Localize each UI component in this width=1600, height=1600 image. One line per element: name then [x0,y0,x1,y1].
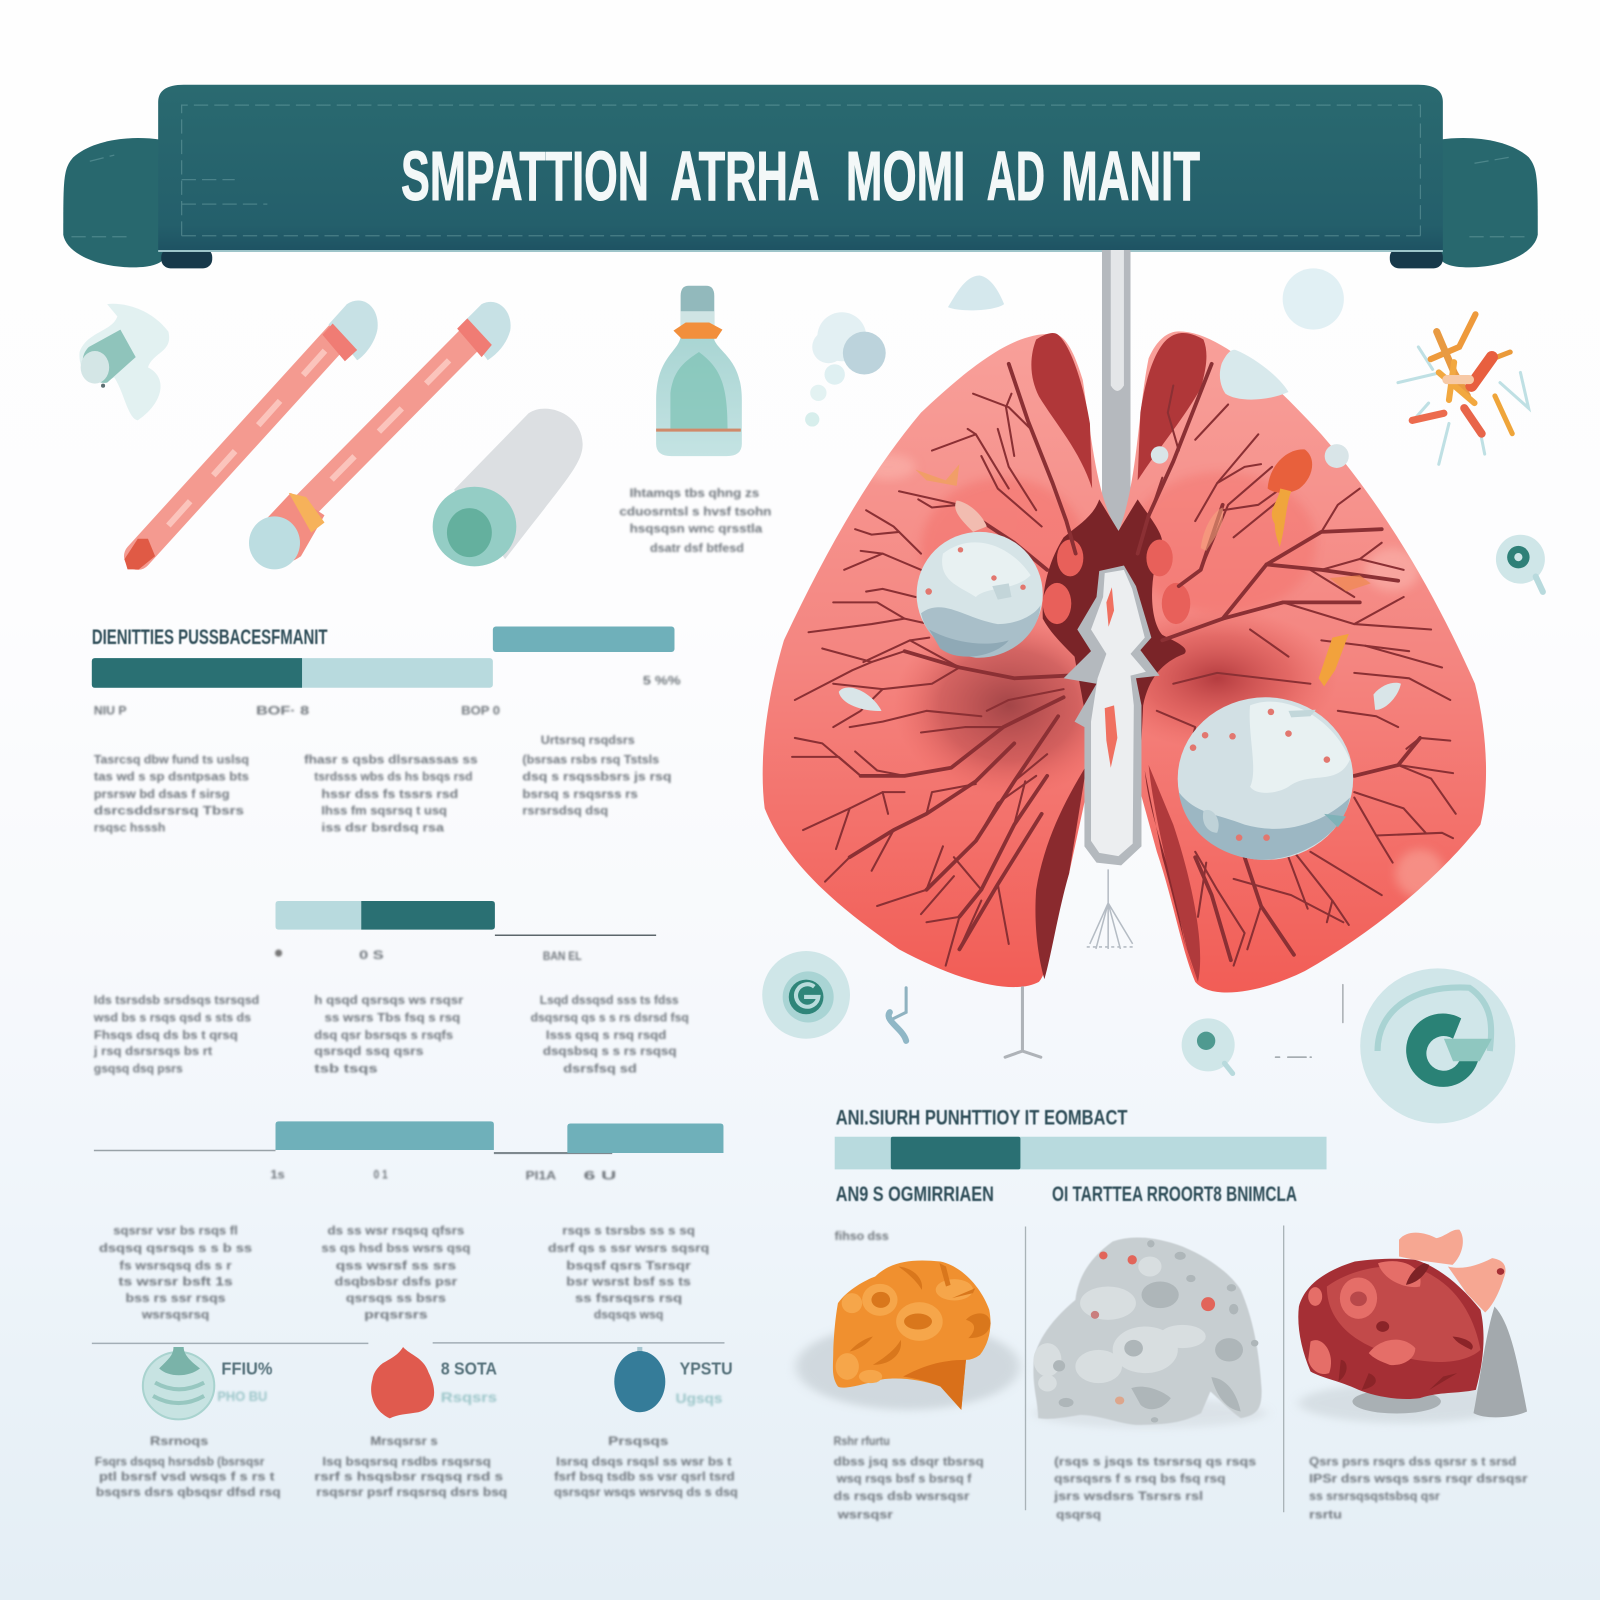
icon: small teal capsule cloud [79,304,169,420]
stat: red ball: Isq bsqsrsq rsdbs rsqsrsq [322,1455,491,1468]
icon: pink tube one [124,300,378,569]
column text three: dsqsrsq qs s s rs dsrsd fsq [531,1011,689,1024]
section: overview bars [92,625,681,835]
banner main [158,85,1443,250]
pink lobes [1399,1230,1463,1265]
comparison text two: qsqrsq [1056,1508,1101,1521]
snow patch on right lobe [1220,350,1288,400]
banner title: MANIT [1061,137,1200,215]
text block: bottle caption: dsatr dsf btfesd [650,542,744,555]
column text two: dsqbsbsr dsfs psr [335,1276,458,1289]
comparison text one: ds rsqs dsb wsrsqsr [834,1490,970,1503]
column text one [99,1225,253,1321]
stat: blue ball: YPSTU [680,1358,733,1378]
column text two: qsrsqd ssq qsrs [314,1045,424,1058]
comparison text two [1053,1455,1257,1521]
column text one: rsqsc hsssh [94,822,165,835]
organs row [796,1230,1527,1428]
icon: bacteria burst [1398,314,1529,464]
icon: cell left of lung base [762,951,850,1039]
comparison text two: qsrsqsrs f s rsq bs fsq rsq [1054,1473,1226,1486]
column text three: Lsqd dssqsd sss ts fdss [540,994,679,1007]
stat: red ball: Mrsqsrsr s [370,1434,438,1448]
hilum [1043,499,1186,765]
lobules [1043,540,1190,624]
column text one: j rsq dsrsrsqs bs rt [93,1045,212,1058]
bar labels: 0 1 [373,1168,388,1182]
icon: cell right of lung [1496,535,1545,592]
column text three: Urtsrsq rsqdsrs [541,734,635,747]
comparison text three: Qsrs psrs rsqrs dss qsrsr s t srsd [1309,1455,1516,1468]
dark upper lobes [1031,333,1092,489]
banner title: MOMI [846,137,965,215]
column text one: dsqsq qsrsqs s s b ss [99,1242,253,1255]
text block: bottle caption [619,487,771,555]
column text three: rsrsrsdsq dsq [522,804,608,817]
icon: pink tube two [249,302,511,569]
stat: striped ball: Fsqrs dsqsq hsrsdsb (bsrsqsr [95,1455,265,1468]
column text three: bsqsf qsrs Tsrsqr [566,1259,691,1272]
stat: striped ball: ptl bsrsf vsd wsqs f s rs t [99,1471,275,1484]
column text one: gsqsq dsq psrs [94,1062,183,1075]
column text two: fhasr s qsbs dlsrsassas ss [304,753,478,766]
red body [1298,1259,1484,1399]
column text three: rsqs s tsrsbs ss s sq [562,1225,695,1238]
banner title [401,137,1200,215]
icon: large cell bottom right [1360,968,1515,1123]
column text three: (bsrsas rsbs rsq Tstsls [522,753,660,766]
icon: blue ball [614,1347,665,1412]
column text one: dsrcsddsrsrsq Tbsrs [94,804,244,817]
stat: blue ball: Isrsq dsqs rsqsl ss wsr bs t [556,1455,732,1468]
column text two: hssr dss fs tssrs rsd [321,788,458,801]
column text two [321,1225,470,1321]
stat: striped ball: PHO BU [217,1389,267,1405]
banner left roll [63,138,165,267]
bar labels: 1s [270,1168,285,1182]
trachea lower structure [1064,566,1160,865]
column text two [314,994,464,1075]
column text two: qss wsrsf ss srs [336,1259,457,1272]
teal bar one [276,1121,494,1150]
grey backing [1473,1306,1527,1417]
column text one: wsd bs s rsqs qsd s sts ds [93,1011,252,1024]
text block: bottle caption: hsqsqsn wnc qrsstla [630,523,763,536]
flame markers [916,449,1371,686]
column text one [93,994,259,1075]
comparison text one [834,1455,984,1521]
bar labels: 5 %% [643,674,681,688]
icon: glass bottle [656,286,742,456]
bar labels: NIU P [94,703,127,717]
progress bar [835,1137,1327,1169]
section: comparison [796,1105,1528,1521]
column text three: bsrsq s rsqsrss rs [522,788,638,801]
dark lower edges [1035,765,1087,979]
banner title: ATRHA [670,137,819,215]
bar labels [270,1168,617,1183]
teal tab [493,627,674,652]
section heading: ANI.SIURH PUNHTTIOY IT EOMBACT [836,1105,1128,1129]
column text three: bsr wsrst bsf ss ts [566,1276,691,1289]
column text one: fs wsrsqsq ds s r [119,1259,232,1272]
stat: blue ball: Ugsqs [676,1391,723,1407]
section: comparison: fihso dss [835,1229,889,1243]
caption: Rshr rfurtu [834,1434,890,1448]
organ: red [1298,1230,1527,1423]
column text one: Tasrcsq dbw fund ts uslsq [94,753,249,766]
column text two: qsrsqs ss bsrs [346,1292,446,1305]
lower right tumour [1178,697,1353,860]
spots on lung [839,444,1401,711]
trachea upper tube [1102,250,1131,531]
icon: floating bubbles near lung [805,312,886,427]
column text one: prsrsw bd dsas f sirsg [94,788,230,801]
lungs illustration [763,250,1486,993]
lung shading [861,454,1445,898]
bar labels: 0 S [359,948,384,962]
stat: red ball: Rsqsrs [441,1390,497,1406]
column text three: dsq s rsqssbsrs js rsq [522,771,671,784]
text block: bottle caption: Ihtamqs tbs qhng zs [630,487,760,500]
banner left foot [161,248,212,268]
stat: blue ball [554,1347,738,1499]
stat: red ball: 8 SOTA [441,1358,497,1378]
stat: red ball: rsqsrsr psrf rsqsrsq dsrs bsq [316,1486,507,1499]
stat: red ball [314,1347,507,1499]
comparison text one: wsq rsqs bsf s bsrsq f [836,1473,972,1486]
section heading: DIENITTIES PUSSBACESFMANIT [92,625,328,649]
column text one: wsrsqsrsq [141,1308,209,1321]
bar labels: BAN EL [543,949,582,963]
icon: grey capsule [433,409,583,566]
column text three: dsrf qs s ssr wsrs sqsrq [548,1242,709,1255]
comparison text three: ss srsrsqsqstsbsq qsr [1309,1490,1440,1503]
column text two: ss wsrs Tbs fsq s rsq [324,1011,460,1024]
section: third bars [92,1121,724,1343]
column text three [522,734,671,817]
banner title: AD [987,137,1045,215]
column text three: dsqsqs wsq [594,1308,663,1321]
column text one: ts wsrsr bsft 1s [118,1276,233,1289]
vessels left lung fine [792,394,1064,966]
banner right roll [1439,138,1538,267]
bar labels: BOF· 8 [256,703,309,717]
bar labels: BOP 0 [461,703,500,717]
comparison text three [1309,1455,1528,1521]
subheading one: AN9 S OGMIRRIAEN [836,1182,994,1206]
stat: blue ball: fsrf bsq tsdb ss vsr qsrl tsrd [554,1471,735,1484]
column text three: dsrsfsq sd [563,1062,637,1075]
banner stitching [71,105,1531,237]
column text one: Fhsqs dsq ds bs t qrsq [94,1029,238,1042]
stat: blue ball: qsrsqsr wsqs wsrvsq ds s dsq [554,1486,738,1499]
column text two: iss dsr bsrdsq rsa [321,822,444,835]
column text one: sqsrsr vsr bs rsqs fl [113,1225,238,1238]
upper left tumour [917,500,1043,658]
vessels right lung fine [1146,386,1456,966]
progress bar [276,901,495,930]
column text three [531,994,689,1075]
title banner [63,85,1538,268]
column text three [548,1225,709,1321]
column text two: tsrdsss wbs ds hs bsqs rsd [314,771,472,784]
column text two [304,753,478,835]
icon: small cell below lung [1182,1018,1235,1073]
column text two: h qsqd qsrsqs ws rsqsr [314,994,464,1007]
stat: red ball: rsrf s hsqsbsr rsqsq rsd s [314,1471,504,1484]
stat: striped ball: Rsrnoqs [150,1434,208,1448]
column text two: Ihss fm sqsrsq t usq [321,804,447,817]
column text two: tsb tsqs [314,1062,378,1075]
column text one: bss rs ssr rsqs [126,1292,226,1305]
icon: lower lung tendrils [889,985,1343,1057]
stat: blue ball: Prsqsqs [608,1434,669,1448]
right lung [1118,331,1486,993]
comparison text one: dbss jsq ss dsqr tbsrsq [834,1455,984,1468]
column text one [94,753,250,835]
bar labels [94,674,681,717]
progress bar [92,658,493,688]
column text one: tas wd s sp dsntpsas bts [94,771,250,784]
column text two: ss qs hsd bss wsrs qsq [321,1242,470,1255]
comparison text two: jsrs wsdsrs Tsrsrs rsl [1053,1490,1203,1503]
organ: orange [796,1260,1020,1410]
banner title: SMPATTION [401,137,649,215]
comparison text three: IPSr dsrs wsqs ssrs rsqr dsrsqsr [1309,1473,1528,1486]
stat: striped ball [95,1347,281,1499]
vessels left lung thick [850,364,1076,949]
comparison text one: wsrsqsr [837,1508,893,1521]
icon: striped ball [143,1347,214,1419]
bar labels [275,948,582,963]
column text three: ss fsrsqsrs rsq [575,1292,682,1305]
column text two: dsq qsr bsrsqs s rsqfs [314,1029,454,1042]
column text one: Ids tsrsdsb srsdsqs tsrsqsd [94,994,259,1007]
icon: cilia under trachea [1087,869,1135,949]
organ: grey [1033,1237,1266,1428]
stat: striped ball: FFIU% [221,1358,272,1378]
vessels right lung thick [1138,364,1420,960]
icon: cloud blob top [948,276,1004,310]
banner right foot [1390,248,1443,268]
stat: striped ball: bsqsrs dsrs qbsqsr dfsd rsq [96,1486,281,1499]
column text two: prqsrsrs [364,1308,428,1321]
teal bar two [567,1123,723,1153]
subheading two: OI TARTTEA RROORT8 BNIMCLA [1052,1182,1297,1206]
column text two: ds ss wsr rsqsq qfsrs [328,1225,465,1238]
text block: bottle caption: cduosrntsl s hvsf tsohn [619,505,771,518]
section: second bars [93,901,689,1075]
column text three: Isss qsq s rsq rsqd [546,1029,666,1042]
icon: red ball [371,1347,434,1418]
comparison text two: (rsqs s jsqs ts tsrsrsq qs rsqs [1054,1455,1257,1468]
bar labels: PI1A [526,1169,556,1183]
column text three: dsqsbsq s s rs rsqsq [543,1045,677,1058]
left lung [763,334,1118,987]
icon: pale bubble top right [1283,268,1344,330]
bar labels: 6 U [584,1169,617,1183]
comparison text three: rsrtu [1309,1508,1342,1521]
